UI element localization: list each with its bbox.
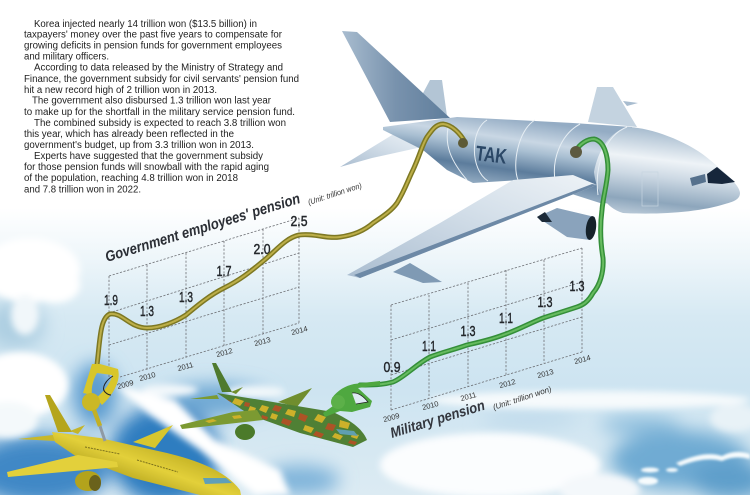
data values: 1.1 (499, 310, 513, 327)
data values: 1.3 (460, 323, 476, 340)
body text block: Finance, the government subsidy for civil servants' pension fund (24, 74, 299, 85)
yellow plane (7, 395, 241, 495)
engine (235, 424, 255, 440)
door (642, 172, 658, 206)
data values: 2.0 (254, 241, 270, 258)
cockpit window (336, 429, 358, 436)
fuselage (52, 432, 241, 495)
body text block: of the population, reaching 4.8 trillion won in 2018 (24, 173, 238, 184)
body text block: government's budget, up from 3.3 trillion won in 2013. (24, 140, 254, 151)
far wing (278, 388, 312, 407)
tail fin (342, 31, 450, 122)
year labels: 2014 (573, 353, 592, 366)
data values: 2.5 (290, 213, 308, 230)
body text block: for those pension funds will snowball with the rapid aging (24, 162, 269, 173)
year labels (116, 324, 309, 391)
year labels: 2009 (116, 378, 135, 391)
chart: government employees' pension (103, 181, 363, 391)
data values: 1.3 (179, 289, 193, 306)
data values: 1.9 (104, 292, 118, 309)
green hose (360, 139, 608, 385)
body text block: taxpayers' money over the past five years to compensate for (24, 30, 283, 40)
near wing (7, 455, 118, 477)
year labels: 2011 (459, 390, 477, 403)
body text block: Korea injected nearly 14 trillion won ($13.5 billion) in (34, 19, 257, 30)
body text block: hit a new record high of 2 trillion won in 2013. (24, 85, 217, 96)
body text block: Experts have suggested that the government subsidy (34, 151, 263, 162)
cockpit window (203, 478, 232, 484)
data values (384, 278, 584, 376)
data values: 1.3 (538, 294, 552, 311)
yellow hose (97, 124, 465, 365)
tail fin (45, 395, 72, 432)
engine (537, 208, 595, 240)
main wing (347, 175, 597, 278)
chart grid (391, 248, 582, 410)
body text block: to make up for the shortfall in the military service pension fund. (24, 107, 295, 118)
cabin window row (85, 447, 178, 472)
wing fence (393, 263, 442, 283)
far tail stabiliser (422, 80, 447, 116)
engine (75, 471, 101, 491)
body text block: and 7.8 trillion won in 2022. (24, 184, 141, 196)
left stabiliser (18, 435, 55, 441)
yellow fuel nozzle (82, 364, 119, 441)
data values: 1.3 (140, 303, 154, 320)
year labels: 2012 (498, 377, 517, 390)
fuselage with camouflage (217, 393, 367, 447)
green hose socket (570, 146, 582, 158)
body text block: growing deficits in pension funds for government employees (24, 40, 282, 52)
chart grid (109, 218, 299, 377)
data values: 0.9 (384, 359, 400, 376)
body text block: The government also disbursed 1.3 trillion won last year (32, 96, 272, 106)
TAK lettering: TAK (474, 142, 508, 169)
chart heading: Government employees' pension (103, 190, 302, 266)
unit label: (Unit: trillion won) (492, 384, 553, 412)
nose (594, 127, 740, 214)
chart: military pension (382, 248, 592, 442)
year labels (382, 353, 592, 424)
body text block: According to data released by the Ministry of Strategy and (34, 62, 283, 74)
body text block: The combined subsidy is expected to reach 3.8 trillion won (34, 118, 286, 129)
body text block: this year, which has already been reflected in the (24, 129, 234, 140)
yellow hose socket (458, 138, 468, 148)
left stabiliser (190, 395, 219, 399)
left stabiliser (340, 132, 422, 167)
far wing (133, 425, 173, 448)
far wing (588, 87, 637, 127)
fuselage (383, 117, 640, 205)
tail fin (212, 363, 232, 392)
year labels: 2012 (215, 346, 234, 359)
data values: 1.3 (570, 278, 584, 295)
year labels: 2013 (253, 335, 272, 348)
year labels: 2013 (536, 367, 555, 380)
year labels: 2010 (138, 370, 157, 383)
fuselage rings (447, 120, 627, 195)
near wing (180, 410, 263, 429)
camouflage green plane (180, 363, 367, 447)
body text block (24, 19, 299, 195)
unit label: (Unit: trillion won) (307, 181, 363, 207)
chart heading: Military pension (388, 398, 487, 442)
year labels: 2011 (176, 360, 194, 373)
year labels: 2010 (421, 399, 440, 412)
body text block: and military officers. (24, 52, 109, 62)
cockpit windows (707, 167, 735, 184)
data values: 1.1 (422, 338, 436, 355)
green fuel nozzle (323, 381, 380, 417)
data values: 1.7 (216, 263, 232, 280)
data values (104, 213, 308, 320)
year labels: 2014 (290, 324, 309, 337)
year labels: 2009 (382, 411, 401, 424)
large tanker plane (340, 31, 740, 283)
